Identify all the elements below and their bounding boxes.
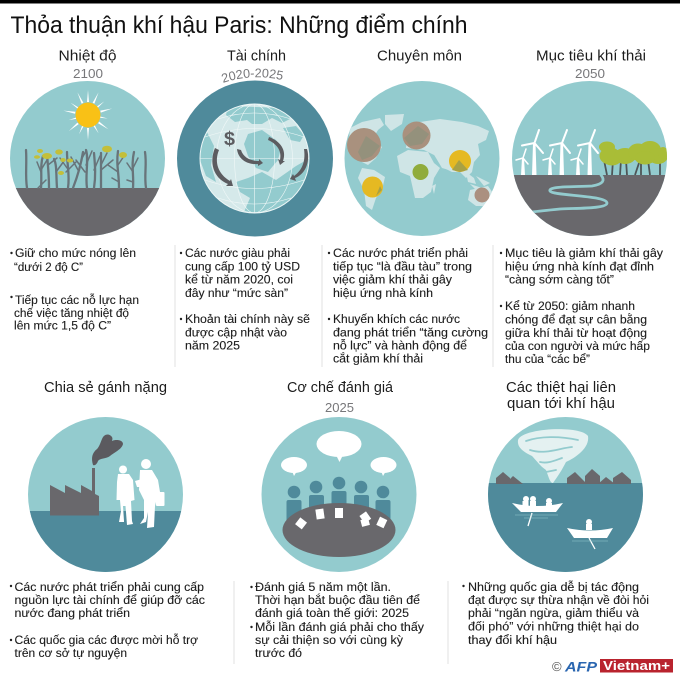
text block: Nhiệt độ: lên mức 1,5 độ C” — [14, 318, 111, 332]
text block: Nhiệt độ: “dưới 2 độ C” — [14, 260, 83, 274]
text block: Chia sẻ gánh nặng: nước đang phát triển — [14, 606, 130, 620]
text block: Cơ chế đánh giá: đánh giá toàn thế giới: 2025 — [255, 606, 409, 620]
text block: Tài chính: năm 2025 — [185, 338, 240, 352]
text block: Tài chính: kể từ năm 2020, coi — [185, 272, 293, 286]
text block: Nhiệt độ: Tiếp tục các nỗ lực hạn — [15, 292, 139, 307]
text block: Các thiệt hại liên quan tới khí hậu — [462, 579, 649, 647]
title: Thỏa thuận khí hậu Paris: Những điểm chính — [10, 12, 468, 39]
text block: Tài chính: được cập nhật vào — [185, 326, 287, 340]
icon: meeting around table — [262, 417, 416, 572]
text block: Chuyên môn: đang phát triển “tăng cường — [333, 326, 488, 340]
icon: world map with highlighted regions — [344, 81, 500, 236]
logo: AFP / Vietnam+ credit — [552, 658, 673, 674]
text block: Chuyên môn: Khuyến khích các nước — [333, 312, 460, 326]
heading: Tài chính: Tài chính — [227, 48, 286, 64]
panel: Nhiệt độ — [10, 50, 165, 332]
panel: Mục tiêu khí thải — [500, 48, 680, 366]
text block: Chia sẻ gánh nặng: Các quốc gia các được mời hỗ trợ — [14, 632, 198, 647]
year: 2020-2025 (curved): 2020-2025 — [222, 68, 283, 83]
text block: Mục tiêu khí thải: Mục tiêu là giảm khí thải gây — [505, 246, 664, 260]
text block: Tài chính — [180, 246, 310, 352]
arrow: left — [212, 148, 233, 186]
text block: Chuyên môn: việc giảm khí thải gây — [333, 272, 453, 286]
text block: Các thiệt hại liên quan tới khí hậu: đối phó” với những thiệt hại do — [468, 620, 639, 634]
arrow: upper right — [268, 137, 285, 165]
text block: Cơ chế đánh giá: Mỗi lần đánh giá phải cho thấy — [255, 619, 425, 634]
text block: Mục tiêu khí thải: chóng để đạt sự cân bằng — [505, 312, 647, 326]
text block: Chia sẻ gánh nặng: nguồn lực tài chính để giúp đỡ các — [14, 593, 205, 607]
text block: Tài chính: Các nước giàu phải — [185, 246, 290, 260]
text block: Mục tiêu khí thải: của con người và mức hấp — [505, 339, 650, 353]
text block: Các thiệt hại liên quan tới khí hậu: thay đổi khí hậu — [468, 633, 557, 647]
icon: tornado, flooded houses and boats — [488, 417, 643, 572]
text block: Chuyên môn: nỗ lực” và hành động để — [333, 338, 467, 352]
icon: factory and two men — [28, 417, 183, 572]
text block: Cơ chế đánh giá — [250, 580, 425, 660]
text block: Mục tiêu khí thải: thu của “các bể” — [505, 352, 590, 366]
text block: Chuyên môn — [328, 246, 488, 366]
arrow: middle — [237, 149, 263, 166]
year: 2100: 2100 — [73, 67, 103, 81]
heading: Cơ chế đánh giá: Cơ chế đánh giá — [287, 380, 394, 396]
logo: AFP / Vietnam+ credit: © — [552, 659, 562, 674]
text block: Các thiệt hại liên quan tới khí hậu: phải “ngăn ngừa, giảm thiểu và — [468, 606, 639, 620]
text block: Cơ chế đánh giá: trước đó — [255, 646, 302, 660]
text block: Các thiệt hại liên quan tới khí hậu: Những quốc gia dễ bị tác động — [468, 579, 639, 594]
heading: Mục tiêu khí thải: Mục tiêu khí thải — [536, 48, 646, 64]
icon: sun over dying trees — [10, 81, 165, 236]
text block: Mục tiêu khí thải — [500, 246, 664, 366]
heading: Các thiệt hại liên quan tới khí hậu: quan tới khí hậu — [507, 396, 615, 412]
heading: Chuyên môn: Chuyên môn — [377, 48, 462, 64]
panel: Cơ chế đánh giá — [250, 380, 425, 660]
logo: AFP / Vietnam+ credit: Vietnam+ — [603, 659, 670, 673]
text block: Chuyên môn: hiệu ứng nhà kính — [333, 286, 433, 300]
text block: Chuyên môn: tiếp tục “là đầu tàu” trong — [333, 260, 472, 274]
arrow: right — [290, 149, 308, 181]
heading: Các thiệt hại liên quan tới khí hậu: Các thiệt hại liên — [506, 380, 616, 396]
year: 2050: 2050 — [575, 67, 605, 81]
heading: Nhiệt độ: Nhiệt độ — [58, 48, 116, 64]
top black bar — [0, 0, 680, 4]
text block: Cơ chế đánh giá: Đánh giá 5 năm một lần. — [255, 580, 391, 594]
text block: Chia sẻ gánh nặng: Các nước phát triển phải cung cấp — [14, 580, 204, 594]
icon: wind turbines, trees and river — [512, 81, 667, 236]
text block: Mục tiêu khí thải: Kể từ 2050: giảm nhanh — [505, 299, 635, 313]
heading: Các thiệt hại liên quan tới khí hậu — [506, 380, 616, 412]
text block: Mục tiêu khí thải: “càng sớm càng tốt” — [505, 272, 614, 286]
text block: Chia sẻ gánh nặng — [10, 580, 205, 660]
text block: Nhiệt độ: Giữ cho mức nóng lên — [15, 246, 136, 260]
text block: Nhiệt độ: chế việc tăng nhiệt độ — [14, 306, 129, 320]
heading: Chia sẻ gánh nặng: Chia sẻ gánh nặng — [44, 380, 167, 396]
text block: Chuyên môn: cắt giảm khí thải — [333, 350, 423, 366]
text block: Tài chính: Khoản tài chính này sẽ — [185, 312, 310, 326]
icon: globe with flow arrows: $ — [224, 129, 235, 150]
panel: Chuyên môn — [328, 48, 500, 366]
year: 2025: 2025 — [325, 401, 354, 415]
text block: Mục tiêu khí thải: giữa khí thải từ hoạt động — [505, 326, 647, 340]
text block: Tài chính: đây như “mức sàn” — [185, 286, 288, 300]
text block: Chuyên môn: Các nước phát triển phải — [333, 246, 468, 260]
panel: Chia sẻ gánh nặng — [10, 380, 205, 660]
panel: Các thiệt hại liên quan tới khí hậu — [462, 380, 650, 647]
panel: Tài chính — [177, 48, 333, 352]
text block: Tài chính: cung cấp 100 tỷ USD — [185, 260, 300, 274]
text block: Các thiệt hại liên quan tới khí hậu: đạt được sự thừa nhận về đòi hỏi — [468, 593, 649, 607]
text block: Chia sẻ gánh nặng: trên cơ sở tự nguyện — [14, 646, 127, 660]
text block: Mục tiêu khí thải: hiệu ứng nhà kính đạt đỉnh — [505, 260, 654, 274]
text block: Nhiệt độ — [10, 246, 139, 332]
logo: AFP / Vietnam+ credit: AFP — [564, 658, 598, 674]
text block: Cơ chế đánh giá: sự cải thiện so với cùng kỳ — [255, 633, 404, 647]
icon: globe with flow arrows — [177, 80, 333, 236]
text block: Cơ chế đánh giá: Thời hạn bắt buộc đầu tiên để — [255, 592, 420, 607]
